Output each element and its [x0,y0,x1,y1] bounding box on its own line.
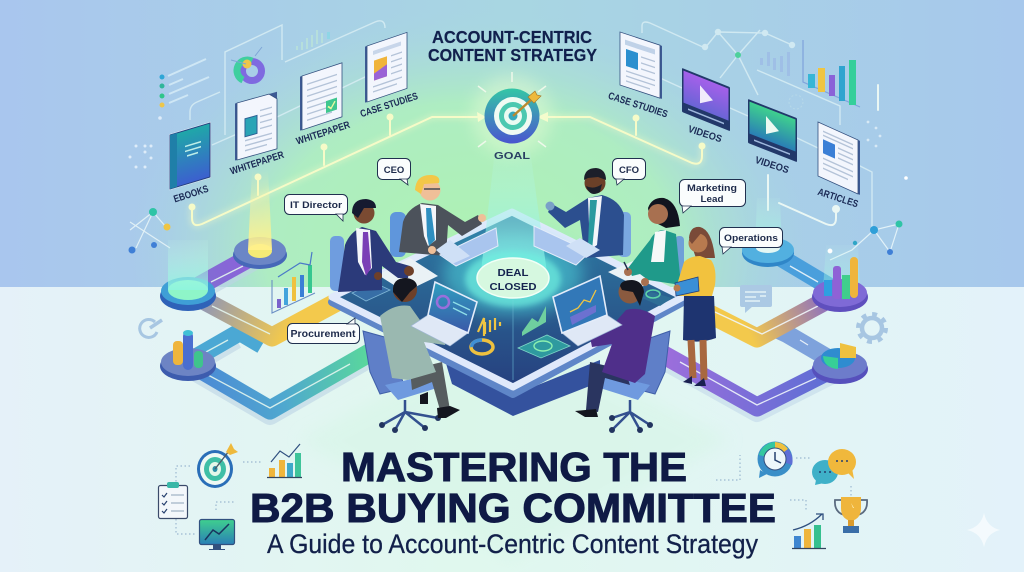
laptop: CFO [534,226,600,265]
pipeline node: yellow beam disc [233,170,287,269]
subtitle: A Guide to Account-Centric Content Strategy [267,529,758,559]
speech bubble: CFO [612,158,646,185]
legs [410,362,450,410]
person: CEO [390,175,486,257]
icon: monitor [200,520,234,550]
torso [590,309,655,383]
speech bubble: IT Director: IT Director [290,200,342,211]
donut chart upper left [231,47,262,80]
pipeline: right pipes [655,250,840,412]
icon: faint chat right [740,285,772,313]
title: mastering the b2b buying committee: B2B BUYING COMMITTEE [250,485,776,531]
dotted connectors bottom [176,455,851,534]
glowing path to goal left [189,112,486,225]
title: mastering the b2b buying committee [250,444,776,531]
torso [380,305,448,380]
speech bubble: Procurement [288,318,360,344]
person: Marketing Lead [624,198,684,286]
table base [445,360,600,416]
deal closed badge: DEAL [498,268,528,279]
laptop: front left [411,282,477,346]
table [332,212,683,416]
icon: video 1 [682,68,730,131]
title: mastering the b2b buying committee: MASTERING THE [341,444,687,490]
table charts [352,283,672,358]
node cluster right [828,121,908,260]
background network lines [190,21,872,228]
heading: account-centric content strategy [428,27,597,65]
deal closed badge [465,251,561,307]
icon: faint gear right [858,314,886,342]
label: case studies right: CASE STUDIES [607,91,669,121]
icon: whitepaper 1 [235,92,277,161]
small bar sparkline upper left [296,30,330,50]
bar chart upper right [760,40,860,109]
icon: small chart left of table [272,252,315,313]
icon: whitepaper 2 [300,63,342,131]
deal closed badge: CLOSED [490,282,536,293]
pipeline node: 3d bars [160,330,216,381]
person: IT Director [330,199,414,292]
chair [632,331,670,394]
speech bubble: Marketing Lead: Marketing [687,183,737,193]
speech bubble: CEO [378,158,410,185]
icon: chat bubbles [812,449,856,485]
icon: ebook [169,122,211,190]
person: front left at laptop [363,278,460,433]
label: videos 1: VIDEOS [686,124,723,145]
decorative legend list upper left [128,59,209,168]
pipeline: left pipes [188,252,378,415]
speech bubble: CFO: CFO [619,165,639,176]
pipeline node: glowing mint cylinder [160,240,216,311]
icon: video 2 [748,99,797,162]
background floor [0,287,1024,572]
person: Operations [674,227,716,386]
light beam to goal [480,150,548,280]
pipeline node: right bars [812,245,868,312]
laptop: CEO [436,228,498,266]
icon: sparkle watermark [967,513,1000,547]
icon: growth bars [792,514,826,548]
table rim [332,218,683,394]
label: goal: GOAL [494,150,531,162]
icon: clipboard [158,482,188,518]
speech bubble: Marketing Lead: Lead [700,194,724,204]
speech bubble: CEO: CEO [384,165,404,176]
label: videos 2: VIDEOS [753,155,790,176]
heading: account-centric content strategy: ACCOUNT-CENTRIC [432,27,592,47]
label: articles: ARTICLES [816,187,860,210]
speech bubble: IT Director [284,194,348,221]
label: case studies left: CASE STUDIES [359,91,420,120]
person: CFO [546,168,631,258]
icon: target bottom left [197,443,238,488]
table top [332,212,683,387]
legs [586,362,630,412]
label: whitepaper 2: WHITEPAPER [295,120,352,148]
icon: case study left [365,32,407,103]
table papers [378,258,668,292]
label: ebooks: EBOOKS [172,184,210,205]
icon: faint target left [140,319,162,337]
pipeline node: right pie [812,343,868,384]
label: whitepaper 1: WHITEPAPER [229,150,286,178]
laptop: front right [553,276,622,346]
icon: case study right [620,32,662,99]
icon: article [818,122,860,195]
line connector right [768,85,878,225]
icon: clock pie [758,442,793,478]
icon: trophy [835,497,867,533]
icon: goal target [472,72,552,156]
heading: account-centric content strategy: CONTENT STRATEGY [428,45,597,65]
speech bubble: Operations: Operations [724,233,778,244]
node cluster left [128,208,170,254]
speech bubble: Operations [720,228,782,254]
person: front right at laptop [575,280,670,433]
background wall [0,0,1024,287]
icon: bar chart bottom [267,444,302,478]
chair [363,331,405,394]
pipeline node: blue right disc [742,198,794,267]
speech bubble: Marketing Lead [680,180,746,213]
speech bubble: Procurement: Procurement [290,329,356,340]
glowing path to goal right [537,112,705,164]
